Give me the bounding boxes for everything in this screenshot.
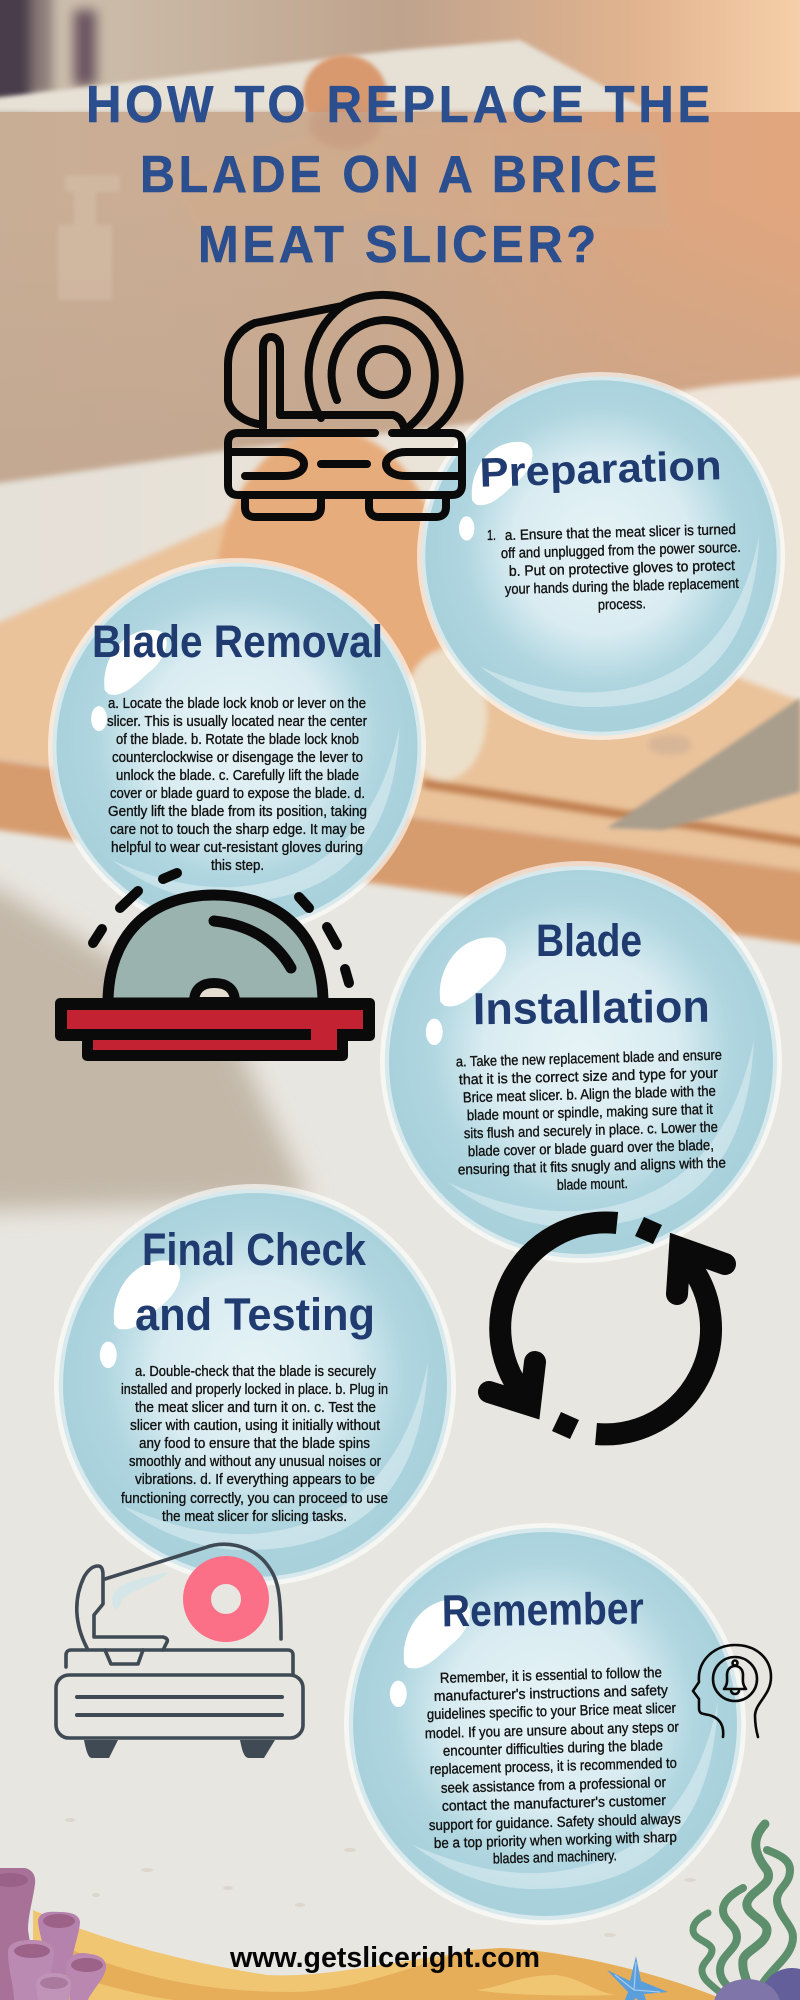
panel: blade installation [380, 861, 782, 1263]
icon: head with bell [693, 1645, 771, 1737]
text: blade removal steps: of the blade. b. Rotate the blade lock knob [116, 732, 359, 748]
text: blade removal steps: care not to touch the sharp edge. It may be [110, 822, 365, 838]
text: blade removal steps: Gently lift the blade from its position, taking [108, 804, 367, 820]
text: blade removal steps [107, 696, 367, 874]
text: blade installation steps: blade cover or blade guard over the blade, [468, 1138, 714, 1160]
text: blade removal steps: cover or blade guard to expose the blade. d. [110, 786, 365, 802]
text: blade removal steps: helpful to wear cut-resistant gloves during [111, 840, 363, 856]
text: final check steps: the meat slicer and turn it on. c. Test the [135, 1400, 376, 1416]
heading: blade installation: Blade [536, 915, 642, 966]
heading: blade installation [473, 915, 710, 1034]
heading: final check and testing: Final Check [142, 1224, 367, 1275]
title: MEAT SLICER? [198, 216, 600, 274]
text: final check steps: any food to ensure that the blade spins [139, 1436, 370, 1452]
text: blade installation steps: blade mount. [557, 1176, 628, 1194]
icon: coral [0, 1868, 106, 2000]
text: blade removal steps: slicer. This is usually located near the center [107, 714, 367, 730]
text: blade installation steps: a. Take the new replacement blade and ensure [456, 1048, 722, 1071]
text: final check steps: the meat slicer for slicing tasks. [162, 1509, 347, 1525]
text: preparation steps: b. Put on protective gloves to protect [509, 558, 735, 580]
icon: saw blade [55, 873, 375, 1061]
heading: blade removal: Blade Removal [92, 616, 383, 667]
icon: meat slicer outline [228, 295, 462, 517]
icon: seaweed [693, 1824, 793, 1995]
icon: starfish [607, 1956, 668, 2000]
text: remember note: encounter difficulties during the blade [443, 1738, 663, 1760]
text: final check steps: installed and properly locked in place. b. Plug in [121, 1382, 388, 1398]
text: final check steps: slicer with caution, using it initially without [130, 1418, 380, 1434]
text: remember note: support for guidance. Safety should always [429, 1812, 681, 1834]
text: blade installation steps: that it is the correct size and type for your [459, 1066, 718, 1088]
text: final check steps: a. Double-check that the blade is securely [135, 1364, 377, 1380]
text: final check steps: smoothly and without any unusual noises or [129, 1454, 381, 1470]
text: preparation steps [487, 522, 741, 614]
text: remember note: seek assistance from a professional or [441, 1775, 666, 1797]
sand [33, 1910, 722, 2000]
heading: remember: Remember [441, 1583, 644, 1636]
panel: final check and testing [54, 1184, 456, 1586]
text: final check steps: vibrations. d. If everything appears to be [135, 1472, 375, 1488]
heading: preparation: Preparation [479, 442, 722, 496]
panel: remember [344, 1523, 746, 1925]
heading: final check and testing: and Testing [135, 1289, 375, 1340]
text: blade installation steps: ensuring that it fits snugly and aligns with the [458, 1155, 726, 1178]
text: remember note: model. If you are unsure about any steps or [425, 1720, 679, 1742]
text: blade removal steps: counterclockwise or disengage the lever to [112, 750, 363, 766]
text: blade removal steps: unlock the blade. c. Carefully lift the blade [116, 768, 359, 784]
text: remember note: guidelines specific to your Brice meat slicer [427, 1701, 676, 1723]
panel: blade removal [48, 558, 426, 936]
text: preparation steps: process. [598, 596, 646, 614]
text: remember note: be a top priority when working with sharp [434, 1830, 677, 1852]
text: blade removal steps: this step. [211, 858, 264, 874]
text: remember note [425, 1665, 681, 1867]
icon: rocks [714, 1968, 800, 2000]
heading: blade installation: Installation [473, 981, 710, 1034]
text: remember note: blades and machinery. [493, 1848, 617, 1867]
text: remember note: replacement process, it is recommended to [430, 1756, 677, 1778]
text: blade installation steps: Brice meat slicer. b. Align the blade with the [463, 1084, 716, 1106]
text: remember note: manufacturer's instructions and safety [434, 1683, 669, 1705]
text: blade installation steps: sits flush and securely in place. c. Lower the [464, 1120, 718, 1142]
text: preparation steps: a. Ensure that the meat slicer is turned [505, 522, 736, 544]
text: final check steps: functioning correctly, you can proceed to use [121, 1491, 388, 1507]
icon: cycle arrows [489, 1217, 725, 1439]
text: blade installation steps [456, 1048, 726, 1194]
footer website: www.getsliceright.com [229, 1942, 540, 1974]
text: blade removal steps: a. Locate the blade lock knob or lever on the [108, 696, 366, 712]
text: blade installation steps: blade mount or spindle, making sure that it [467, 1102, 713, 1124]
text: remember note: contact the manufacturer's customer [442, 1793, 666, 1815]
text: preparation steps: 1. [487, 528, 496, 544]
text: final check steps [121, 1364, 388, 1525]
text: preparation steps: off and unplugged from the power source. [501, 540, 741, 562]
icon: slicer with pink blade [56, 1544, 303, 1758]
title: BLADE ON A BRICE [140, 146, 661, 204]
heading: final check and testing [135, 1224, 375, 1340]
text: preparation steps: your hands during the blade replacement [505, 576, 739, 598]
title: HOW TO REPLACE THE [86, 76, 714, 134]
title [86, 76, 714, 274]
panel: preparation [417, 372, 785, 740]
text: remember note: Remember, it is essential to follow the [440, 1665, 662, 1687]
